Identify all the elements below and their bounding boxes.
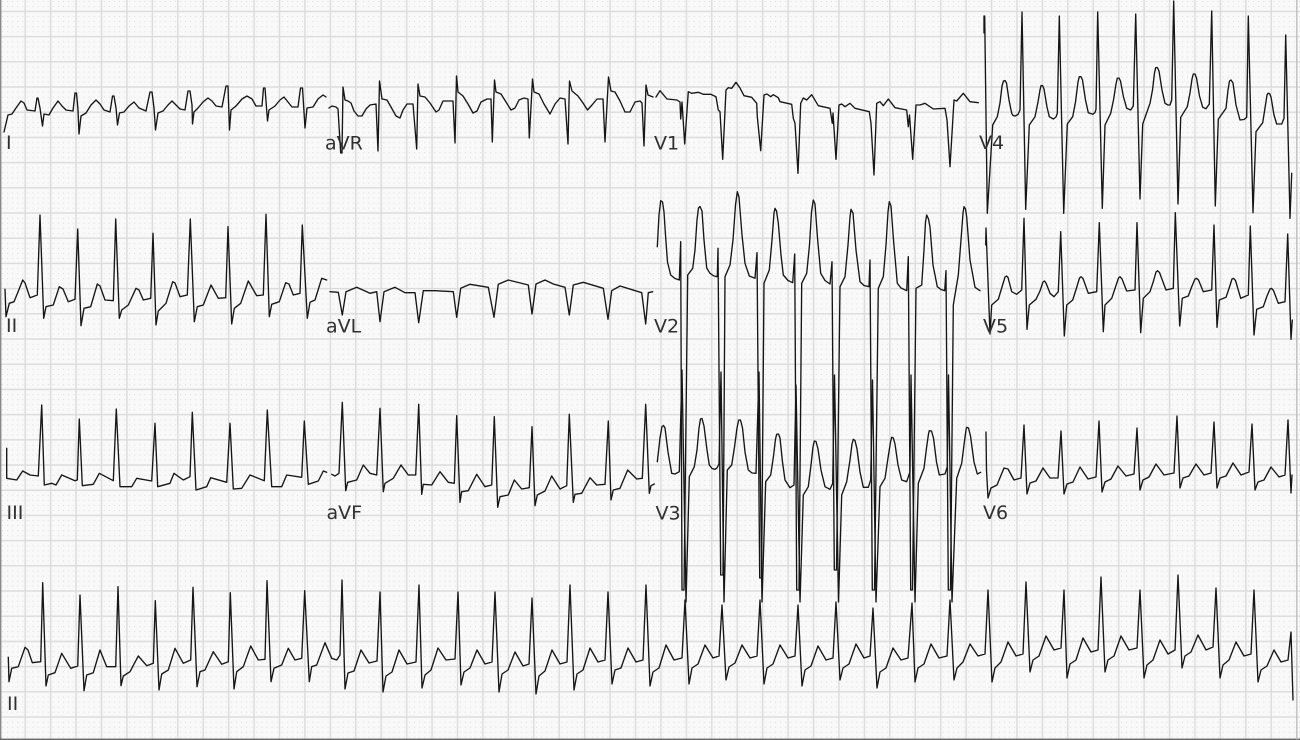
rhythm strip lead II trace [8,575,1293,700]
label: aVR: aVR [325,132,363,154]
label: III: III [6,502,23,524]
label: aVF: aVF [326,502,362,524]
lead V6 trace [986,416,1292,498]
label: V2: V2 [654,316,679,338]
lead II trace [5,214,327,326]
label: I: I [6,132,12,154]
lead I trace [4,86,326,134]
label: V4: V4 [979,132,1004,154]
label: II rhythm strip: II [7,693,18,715]
label: V5: V5 [983,316,1008,338]
lead III trace [7,405,327,490]
label: V1: V1 [654,132,679,154]
lead V2 trace [657,192,980,590]
lead V5 trace [986,213,1292,339]
lead V4 trace [984,1,1292,218]
lead aVF trace [332,402,654,507]
lead aVR trace [329,76,653,153]
label: V6: V6 [983,502,1008,524]
label: aVL: aVL [326,316,362,338]
lead V1 trace [656,82,978,175]
lead V3 trace [657,370,981,602]
label: II: II [6,315,17,337]
lead labels [6,132,1008,715]
label: V3: V3 [656,502,681,524]
lead aVL trace [330,280,653,324]
